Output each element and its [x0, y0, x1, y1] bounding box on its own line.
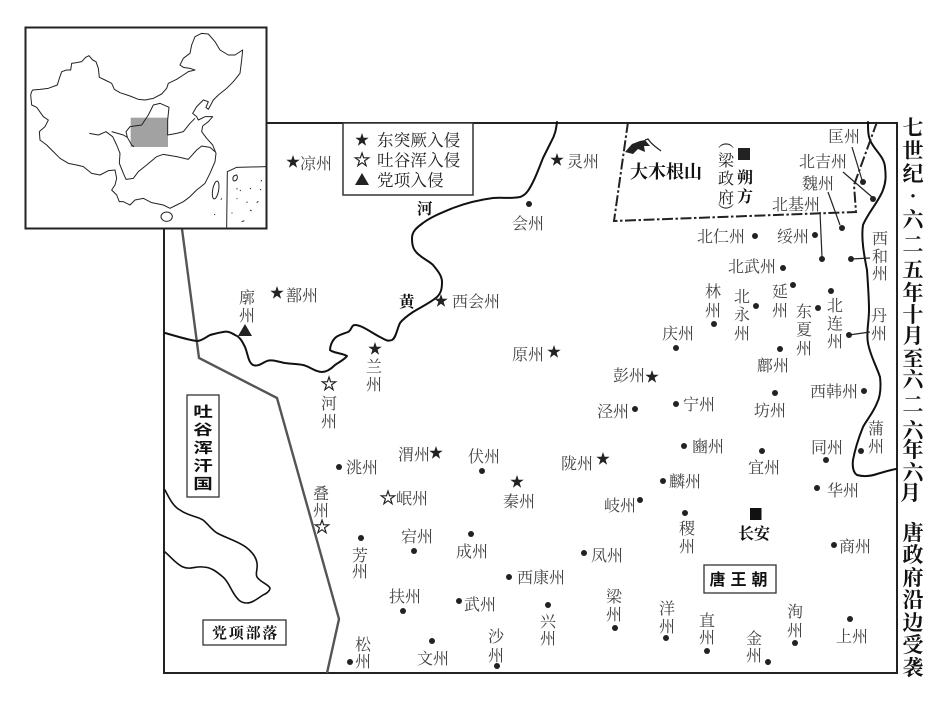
vertical title: 月 [900, 481, 921, 505]
place: 芳州 [352, 535, 368, 581]
place: 叠州: 叠 [313, 485, 329, 503]
place: 凉州 [286, 155, 332, 173]
vertical title: 边 [902, 611, 924, 635]
Shuofang: Liang government seat: 政 [718, 170, 734, 188]
box: 吐谷浑汗国: 汗 [193, 458, 213, 474]
place: 绥州: 绥州 [777, 228, 809, 246]
Shuofang: Liang government seat: ） [716, 203, 733, 219]
place: 魏州 [802, 175, 845, 231]
Yellow River: western course [165, 122, 557, 372]
place: 洵州: 洵 [787, 603, 803, 621]
place: 西康州: 西康州 [517, 569, 565, 587]
place: 岐州: 岐州 [604, 497, 636, 515]
place: 芳州: 芳 [352, 547, 368, 565]
vertical title: 年 [902, 281, 924, 305]
place: 沙州: 州 [488, 647, 504, 665]
place: 麟州: 麟州 [669, 473, 701, 491]
place: 松州: 松 [355, 636, 372, 654]
place: 陇州: 陇州 [561, 455, 593, 473]
river label: 河: 河 [417, 200, 433, 218]
place: 鄜州 [757, 346, 789, 375]
place: 沙州 [488, 628, 505, 669]
place: 北武州: 北武州 [728, 258, 776, 276]
vertical title: 五 [902, 258, 924, 282]
place: 秦州 [503, 475, 535, 511]
vertical title: 月 [902, 324, 924, 348]
place: 西和州: 西 [872, 230, 888, 248]
panel: main map frame [164, 123, 897, 673]
vertical title: 六 [902, 368, 926, 392]
box: 党项部落 [203, 620, 286, 645]
Shuofang: Liang government seat: 方 [737, 187, 753, 206]
place: 河州: 州 [321, 413, 337, 431]
capital: 长安: 长安 [738, 525, 771, 543]
place: 北连州: 北 [827, 297, 843, 315]
place: 兴州 [540, 602, 557, 648]
coast / lake shape: western region [165, 490, 270, 603]
inset: South China Sea box [214, 167, 266, 227]
vertical title: 七 [902, 116, 924, 140]
box: 唐王朝: 唐王朝 [709, 570, 773, 589]
place: 岷州: 岷州 [396, 490, 428, 508]
place: 直州: 直 [699, 612, 715, 630]
vertical title: 六 [902, 419, 926, 443]
place: 梁州: 州 [606, 606, 622, 624]
vertical title: 二 [902, 393, 924, 417]
vertical title: 纪 [902, 162, 924, 186]
place: 廓州: 廓 [239, 289, 255, 307]
place: 会州: 会州 [512, 215, 544, 233]
place: 兰州: 兰 [366, 358, 382, 376]
place: 华州 [814, 482, 859, 500]
place: 丹州: 丹 [871, 307, 887, 325]
place: 东夏州: 州 [796, 340, 812, 358]
place: 彭州: 彭州 [613, 367, 645, 385]
place: 岷州 [381, 490, 428, 508]
place: 北仁州: 北仁州 [697, 228, 745, 246]
place: 叠州: 州 [313, 502, 329, 520]
place: 河州: 河 [321, 395, 337, 413]
vertical title: · [909, 184, 917, 208]
place: 北基州: 北基州 [772, 196, 820, 214]
place: 稷州 [679, 510, 696, 556]
place: 丹州: 州 [871, 325, 887, 343]
place: 林州: 林 [705, 283, 721, 301]
place: 直州 [699, 612, 715, 654]
place: 梁州: 梁 [606, 587, 623, 606]
place: 梁州 [606, 587, 623, 631]
place: 北连州 [827, 288, 843, 351]
place: 宜州: 宜州 [748, 459, 780, 477]
place: 松州: 州 [355, 653, 371, 671]
place: 松州 [347, 636, 372, 671]
place: 同州: 同州 [811, 439, 843, 457]
place: 匡州 [828, 128, 866, 185]
place: 会州 [512, 201, 544, 233]
inset: Taiwan island [211, 181, 220, 199]
place: 西和州: 和 [872, 248, 888, 266]
place: 上州: 上州 [836, 628, 868, 646]
box: 吐谷浑汗国: 浑 [193, 440, 213, 456]
place: 文州: 文州 [417, 650, 449, 668]
Shuofang: Liang government seat: 朔 [737, 169, 753, 187]
place: 延州: 州 [772, 302, 788, 320]
legend: Tuyuhun: 吐谷浑入侵 [377, 151, 460, 170]
place: 鄜州: 鄜州 [757, 357, 789, 375]
place: 庆州: 庆州 [662, 325, 694, 343]
vertical title: 府 [902, 566, 924, 590]
vertical title: 袭 [902, 656, 924, 680]
vertical title: 沿 [902, 588, 924, 612]
grey boundary: Tang western frontier [182, 229, 339, 673]
place: 成州: 成州 [456, 543, 488, 561]
place: 洋州: 州 [659, 618, 675, 636]
place: 西韩州: 西韩州 [810, 383, 858, 401]
place: 北永州: 北 [734, 288, 750, 306]
vertical title: 六 [902, 208, 926, 232]
Shuofang: Liang government seat: 梁 [718, 151, 735, 170]
place: 渭州: 渭州 [398, 446, 430, 464]
place: 蒲州: 州 [868, 438, 884, 456]
place: 坊州 [754, 390, 786, 420]
place: 洵州 [787, 603, 803, 646]
place: 北永州 [734, 288, 759, 343]
vertical title: 至 [902, 347, 924, 371]
place: 延州 [772, 282, 796, 320]
inset: highlighted study area [131, 118, 168, 147]
place: 灵州 [550, 153, 599, 171]
place: 扶州 [389, 588, 421, 614]
vertical title: 十 [902, 303, 924, 327]
place: 洋州 [659, 600, 675, 641]
Shuofang: Liang government seat: （ [716, 133, 733, 149]
place: 西和州: 州 [872, 265, 888, 283]
place: 兴州: 兴 [540, 613, 557, 631]
legend: eastern Turks: 东突厥入侵 [377, 131, 460, 150]
place: 华州: 华州 [827, 482, 859, 500]
place: 灵州: 灵州 [567, 153, 599, 171]
place: 宕州: 宕州 [401, 528, 433, 546]
capital: 长安 [738, 508, 771, 543]
place: 芳州: 州 [352, 563, 368, 581]
place: 廓州 [238, 289, 255, 336]
place: 商州: 商州 [839, 538, 871, 556]
box: 吐谷浑汗国: 谷 [193, 422, 213, 438]
place: 凉州: 凉州 [300, 155, 332, 173]
place: 叠州 [313, 485, 329, 533]
vertical title: 年 [902, 438, 924, 462]
place: 洮州: 洮州 [346, 459, 378, 477]
place: 北连州: 连 [827, 315, 843, 333]
place: 兰州: 州 [366, 376, 382, 394]
inset: Hainan island [161, 212, 172, 221]
place: 上州 [836, 616, 868, 646]
Shuofang: Liang government seat: 府 [718, 189, 734, 207]
place: 西和州 [848, 230, 888, 283]
place: 武州: 武州 [464, 596, 496, 614]
place: 凤州: 凤州 [591, 547, 623, 565]
place: 金州: 州 [746, 647, 762, 665]
box: 党项部落: 党项部落 [212, 624, 279, 642]
place: 鄯州: 鄯州 [286, 287, 318, 305]
place: 蒲州: 蒲 [868, 420, 884, 438]
place: 洵州: 州 [787, 622, 803, 640]
place: 金州 [746, 630, 771, 665]
place: 宁州: 宁州 [683, 396, 715, 414]
box: 吐谷浑汗国 [187, 395, 219, 497]
Yellow River: eastern course [853, 122, 896, 476]
place: 林州: 州 [705, 302, 721, 320]
place: 东夏州 [796, 303, 821, 358]
place: 西会州 [434, 293, 500, 311]
place: 原州: 原州 [512, 346, 544, 364]
place: 北连州: 州 [827, 333, 843, 351]
place: 匡州: 匡州 [828, 128, 860, 146]
vertical title: 唐 [902, 521, 924, 545]
place: 坊州: 坊州 [754, 402, 786, 420]
inset: Yangtze river [89, 132, 215, 179]
place: 沙州: 沙 [488, 628, 505, 646]
vertical title: 六 [902, 461, 926, 485]
place: 林州 [705, 283, 721, 327]
legend: Dangxiang: 党项入侵 [377, 171, 444, 190]
place: 廓州: 州 [239, 307, 255, 325]
icon: mountain [625, 139, 661, 154]
place: 北永州: 州 [734, 325, 750, 343]
heading: Damugen mountain: 大木根山 [630, 161, 702, 182]
place: 北基州 [772, 196, 825, 262]
place: 河州 [321, 377, 337, 431]
place: 稷州: 稷 [679, 520, 696, 538]
place: 兰州 [366, 342, 382, 394]
river label: 黄: 黄 [399, 292, 417, 311]
place: 宕州 [401, 528, 433, 554]
place: 豳州: 豳州 [692, 438, 724, 456]
place: 延州: 延 [772, 283, 788, 301]
inset: China outline [31, 33, 243, 208]
panel: China locator inset [26, 28, 266, 228]
place: 鄯州 [270, 286, 318, 305]
place: 洋州: 洋 [659, 600, 675, 618]
place: 伏州 [468, 448, 500, 474]
vertical title: 受 [902, 633, 924, 657]
place: 陇州 [561, 452, 610, 473]
place: 渭州 [398, 446, 443, 464]
place: 东夏州: 夏 [796, 321, 812, 339]
place: 伏州: 伏州 [468, 448, 500, 466]
vertical title: 政 [902, 543, 924, 567]
place: 西会州: 西会州 [452, 293, 500, 311]
vertical title: 二 [902, 233, 924, 257]
place: 原州 [512, 345, 561, 364]
place: 蒲州 [858, 420, 884, 456]
place: 扶州: 扶州 [389, 588, 421, 606]
place: 北永州: 永 [734, 306, 750, 324]
place: 兴州: 州 [540, 630, 556, 648]
inset: Yellow river [112, 103, 195, 147]
place: 北吉州 [799, 153, 876, 202]
box: 唐王朝 [704, 565, 776, 593]
Shuofang: Liang government seat [716, 133, 753, 219]
place: 宜州 [748, 448, 780, 477]
place: 丹州 [846, 307, 887, 343]
panel: legend [343, 123, 473, 195]
place: 金州: 金 [746, 630, 762, 648]
vertical title [900, 116, 926, 680]
place: 东夏州: 东 [796, 303, 812, 321]
place: 文州 [417, 638, 449, 668]
place: 成州 [456, 531, 488, 561]
dash-dot border: Liang Shifu territory [614, 122, 877, 221]
box: 吐谷浑汗国: 吐 [193, 404, 213, 420]
place: 秦州: 秦州 [503, 493, 535, 511]
place: 泾州: 泾州 [597, 403, 629, 421]
place: 彭州 [613, 367, 659, 385]
place: 魏州: 魏州 [802, 175, 834, 193]
place: 庆州 [662, 325, 694, 351]
place: 北吉州: 北吉州 [799, 153, 847, 171]
box: 吐谷浑汗国: 国 [193, 476, 213, 492]
vertical title: 世 [902, 139, 924, 163]
place: 稷州: 州 [679, 538, 695, 556]
place: 直州: 州 [699, 629, 715, 647]
